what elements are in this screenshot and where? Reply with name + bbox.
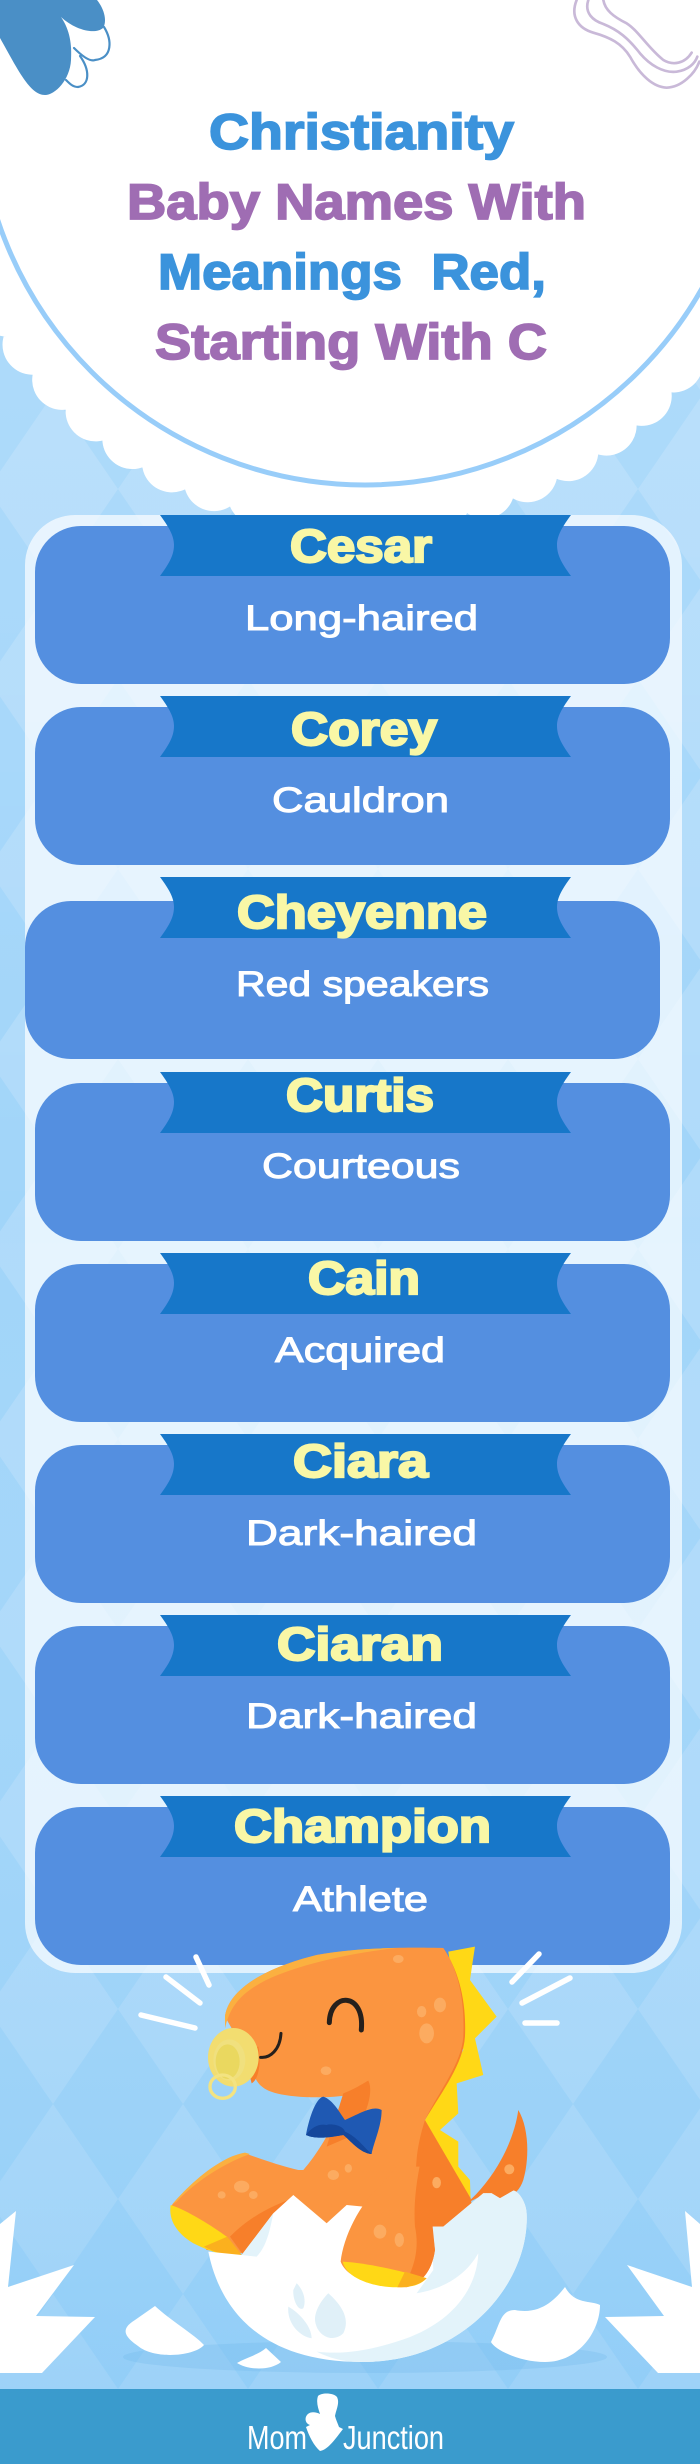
chin shadow	[327, 2081, 370, 2147]
card: Corey: Corey	[291, 703, 437, 755]
illustration: baby dinosaur hatching from egg	[170, 1947, 527, 2362]
head highlight	[225, 1948, 397, 2028]
skin spots	[218, 1955, 514, 2247]
arm	[171, 2153, 337, 2253]
card: Curtis: Curtis	[286, 1069, 434, 1121]
egg spots	[288, 2283, 346, 2338]
card: Cesar	[35, 515, 670, 684]
card: Ciaran	[35, 1615, 670, 1784]
card: Curtis	[35, 1069, 670, 1241]
card: Champion	[35, 1796, 670, 1965]
decoration: white shards bottom right	[605, 2211, 700, 2373]
card: Ciaran: Ciaran	[277, 1618, 443, 1670]
footer bar	[0, 2389, 700, 2464]
card: Ciara	[35, 1434, 670, 1603]
title: Christianity	[209, 104, 514, 160]
card: Cain: Cain	[308, 1252, 420, 1304]
decoration: white shards bottom left	[0, 2211, 95, 2373]
front foot	[343, 2262, 427, 2287]
card: Cesar: Cesar	[290, 520, 432, 572]
egg	[208, 2191, 527, 2362]
panel: names list backing	[25, 515, 682, 1973]
icon: purple wavy lines top right	[574, 0, 699, 88]
card: Curtis: Courteous	[262, 1147, 460, 1186]
title: Starting With C	[155, 314, 547, 370]
card: Cain	[35, 1252, 670, 1422]
back spikes	[423, 1947, 497, 2200]
icon: blue ear top left	[0, 0, 109, 95]
ground shadow	[123, 2341, 607, 2373]
card: Cheyenne: Cheyenne	[237, 886, 487, 938]
bow tie	[306, 2097, 382, 2154]
card: Champion: Athlete	[293, 1880, 428, 1919]
card: Cheyenne	[25, 877, 660, 1059]
title	[127, 104, 586, 370]
icon: spark lines around dinosaur	[141, 1954, 570, 2028]
card: Ciara: Dark-haired	[246, 1514, 477, 1553]
title: Meanings Red,	[158, 244, 546, 300]
arm foot	[170, 2205, 242, 2256]
card: Cesar: Long-haired	[245, 599, 478, 638]
icon: eggshell shard right	[491, 2287, 600, 2362]
front leg	[341, 2167, 435, 2287]
icon: eggshell shard left	[126, 2306, 204, 2355]
header: scalloped white circle with ring	[0, 0, 700, 523]
eyes	[261, 2033, 281, 2057]
logo: MomJunction	[247, 2393, 444, 2456]
pacifier	[243, 2047, 260, 2083]
card: Cheyenne: Red speakers	[236, 965, 489, 1004]
card: Corey: Cauldron	[272, 781, 449, 820]
logo: MomJunction: Mom	[247, 2419, 307, 2456]
egg shading	[317, 2191, 527, 2362]
card: Ciara: Ciara	[293, 1435, 428, 1487]
card: Corey	[35, 696, 670, 865]
icon: eggshell shard small	[237, 2348, 281, 2368]
logo: MomJunction: Junction	[343, 2419, 444, 2456]
card: Cain: Acquired	[275, 1331, 445, 1370]
card: Ciaran: Dark-haired	[246, 1697, 477, 1736]
card: Champion: Champion	[234, 1800, 491, 1852]
head and neck	[225, 1948, 464, 2243]
body dark side	[363, 1948, 477, 2250]
title: Baby Names With	[127, 174, 586, 230]
tail	[467, 2110, 527, 2203]
